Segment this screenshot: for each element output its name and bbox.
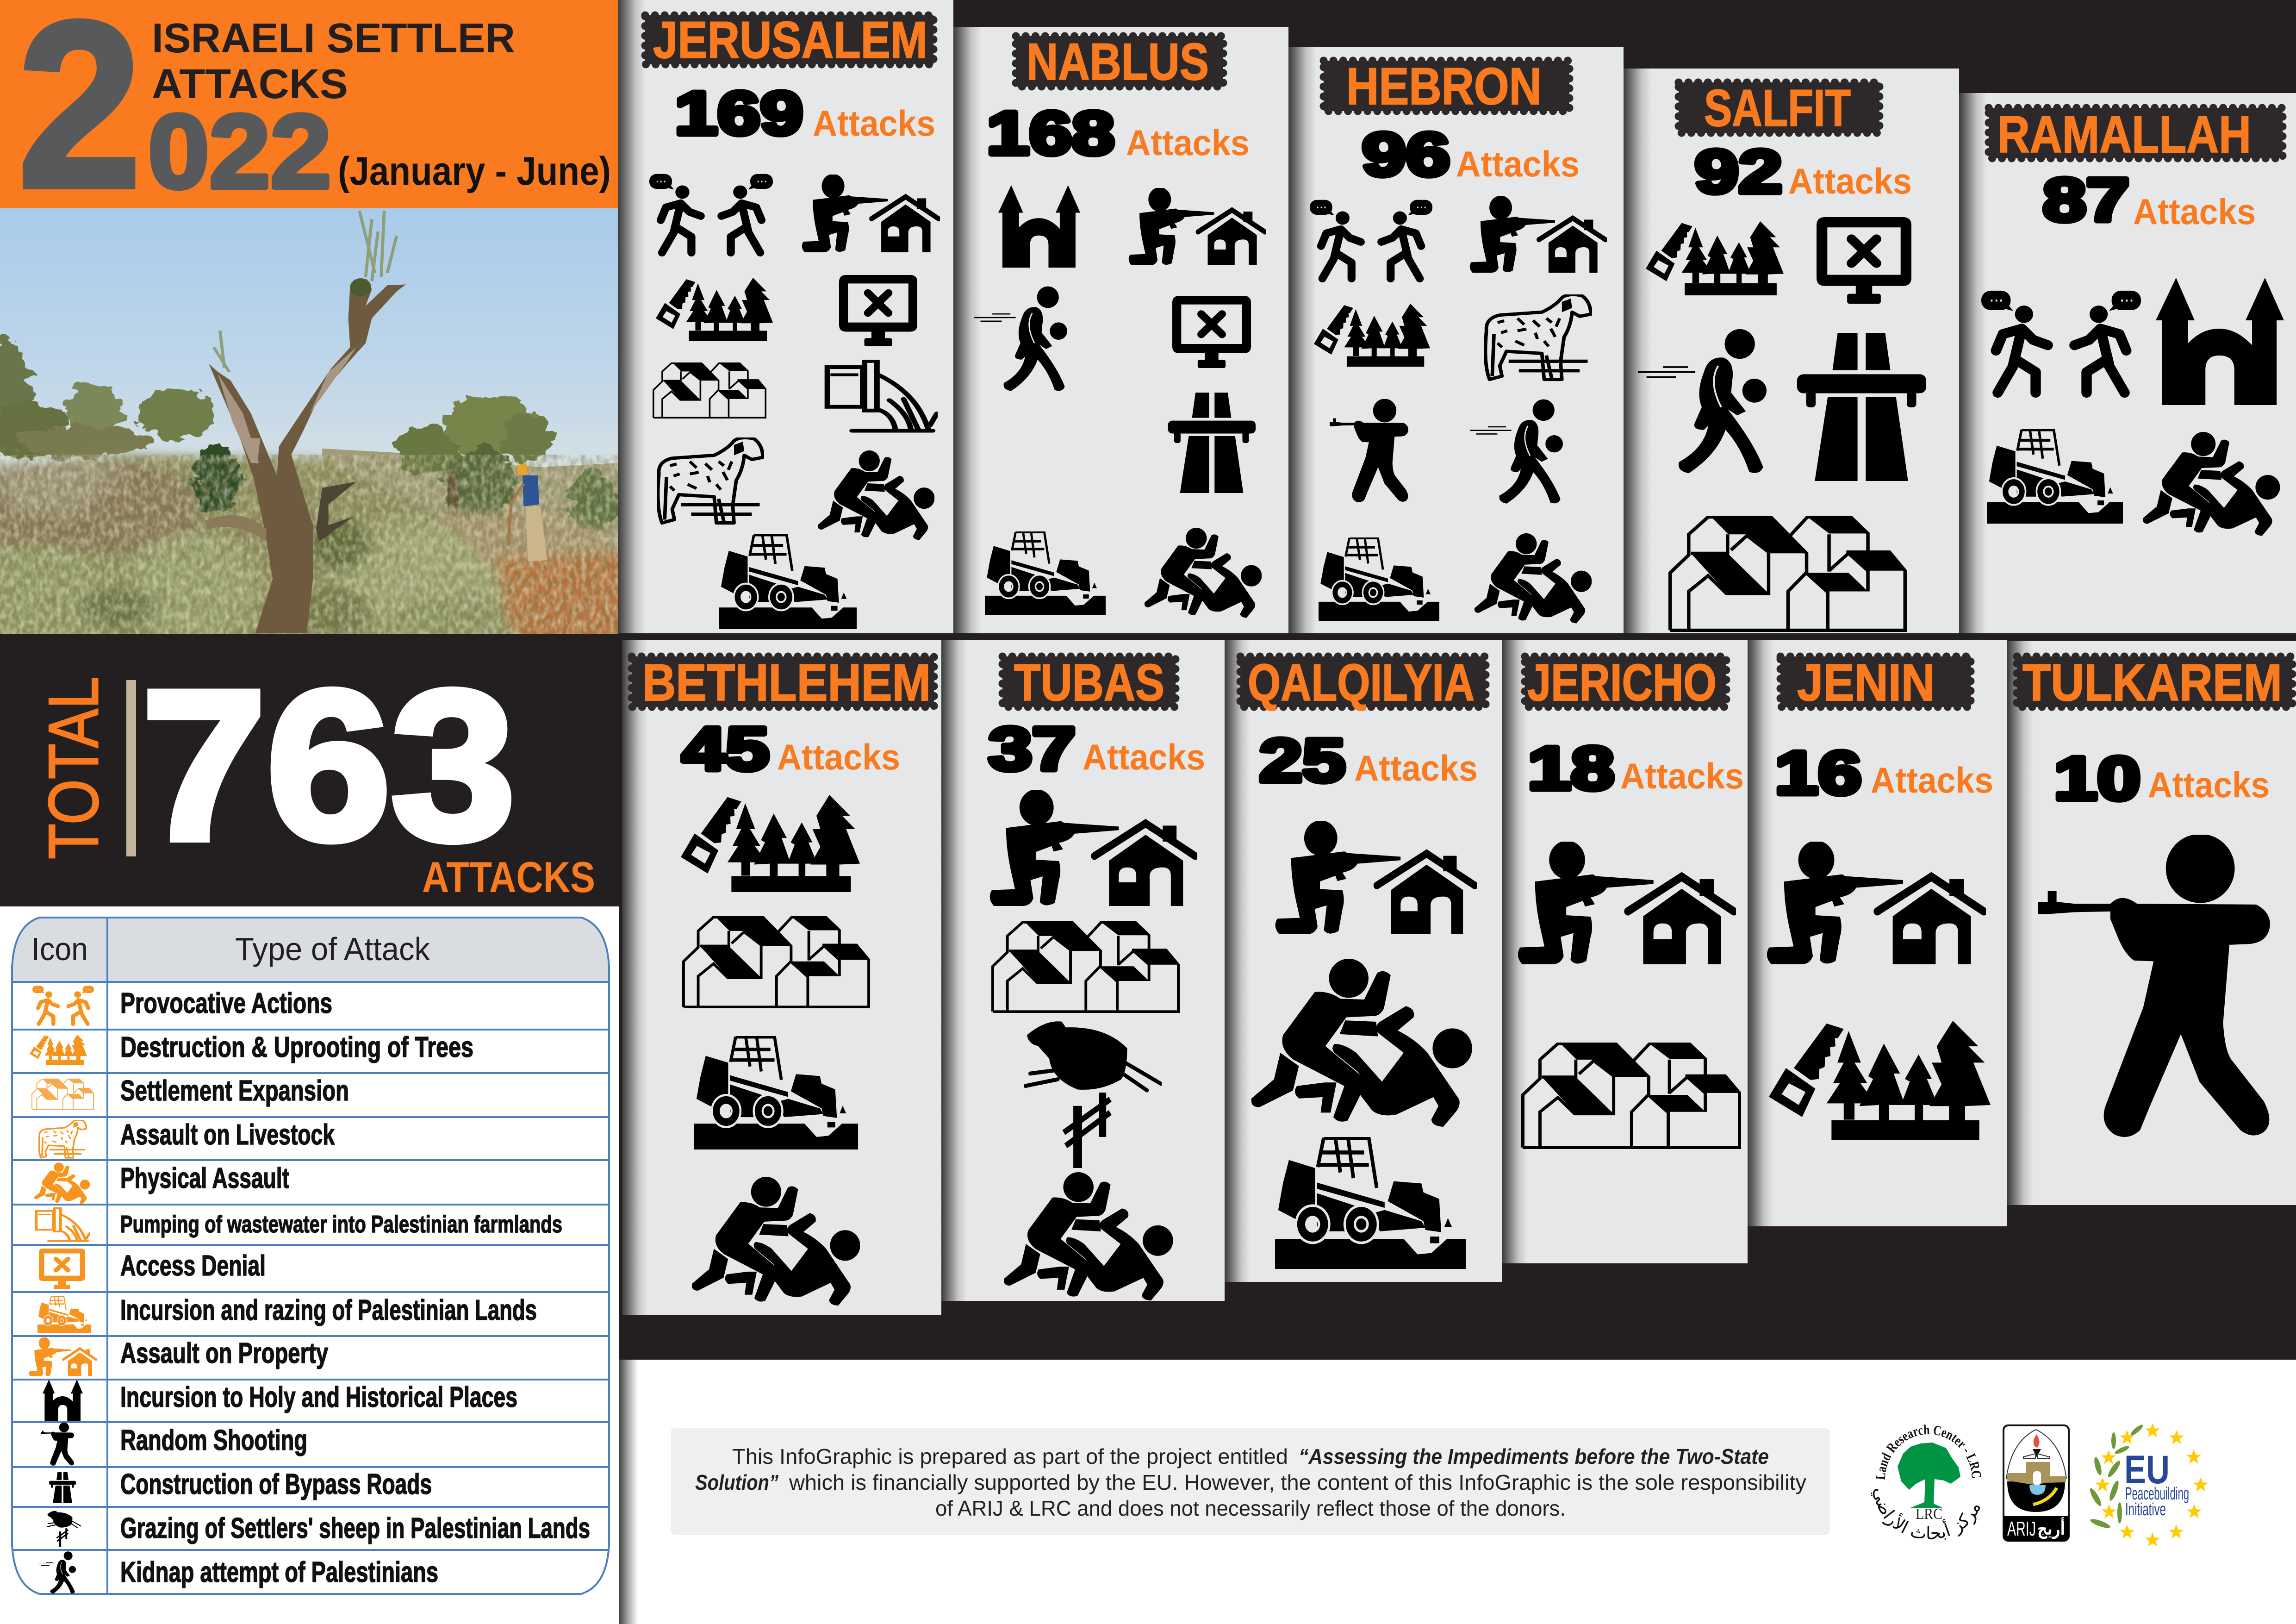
legend row: access denial [39,1249,266,1289]
count: Bethlehem: 45 [682,715,769,783]
count: Jerusalem: Attacks [813,103,935,144]
legend row: assault on livestock: Assault on Livestock [120,1119,335,1151]
legend row: assault on livestock [39,1119,335,1158]
legend row: provocative actions: Provocative Actions [120,987,332,1019]
banner: Ramallah: RAMALLAH [1997,106,2251,163]
table header: type of attack: Type of Attack [235,931,430,967]
legend row: pumping wastewater [36,1208,562,1241]
legend row: bypass roads: Construction of Bypass Roads [120,1468,432,1500]
count: Tubas [989,715,1205,783]
icons: Jerusalem [649,174,939,629]
banner: Jericho: JERICHO [1527,654,1717,712]
count: Hebron: Attacks [1456,144,1580,184]
logo: EU Peacebuilding Initiative [2088,1423,2208,1547]
count: Nablus [987,99,1250,167]
logo: Land Research Center: Land Research Center - LRC [1873,1422,1984,1480]
banner: Qalqilyia: QALQILYIA [1248,654,1475,712]
legend row: provocative actions [32,986,332,1024]
panel: Nablus [953,27,1288,633]
count: Qalqilyia: 25 [1259,726,1345,794]
count: Bethlehem [682,715,900,783]
panel: Ramallah [1959,93,2296,633]
panel: Tulkarem [2007,641,2296,1205]
legend row: holy places [43,1380,517,1421]
table header: icon: Icon [31,931,88,967]
count: Ramallah: 87 [2043,166,2129,234]
logo: Land Research Center [1871,1422,1985,1544]
count: Jenin: 16 [1775,739,1861,807]
legend row: assault on property [29,1337,328,1376]
count: Ramallah [2043,166,2256,234]
count: Tulkarem: Attacks [2148,764,2270,805]
panel: Jerusalem [618,0,953,633]
logo: ARIJ: ARIJ [2007,1518,2036,1540]
count: Salfit: Attacks [1788,161,1912,201]
legend row: access denial: Access Denial [120,1250,266,1282]
icons: Jenin [1767,841,1991,1140]
icons: Qalqilyia [1251,820,1475,1269]
count: Tulkarem: 10 [2054,744,2140,812]
total attacks panel [0,634,619,906]
panel: Jenin [1748,640,2007,1226]
icons: Nablus [974,185,1265,618]
banner: Salfit: SALFIT [1704,79,1851,137]
count: Jerusalem [675,79,935,147]
title line two: ATTACKS [152,61,348,107]
count: Qalqilyia [1259,726,1478,794]
legend row: grazing sheep: Grazing of Settlers' sheep in Palestinian Lands [120,1512,590,1544]
legend row: random shooting: Random Shooting [120,1424,307,1456]
icons: Hebron [1310,196,1605,623]
panel: Salfit [1624,69,1959,633]
disclaimer box [671,1428,1830,1535]
disclaimer box: which is financially supported by the EU. However, the content of this InfoGraphic is the sole responsibility [789,1470,1806,1494]
disclaimer box: This InfoGraphic is prepared as part of the project entitled [732,1444,1288,1468]
panel: Jericho [1502,640,1748,1263]
count: Jenin: Attacks [1871,760,1993,800]
banner: Bethlehem: BETHLEHEM [642,654,931,712]
total number: 763 [142,647,516,884]
legend row: destruction of trees [30,1031,473,1065]
legend row: bypass roads [49,1468,432,1503]
legend row: settlement expansion: Settlement Expansion [120,1075,349,1107]
legend row: physical assault: Physical Assault [120,1162,289,1194]
legend row: destruction of trees: Destruction & Uprooting of Trees [120,1031,473,1063]
panel: Qalqilyia [1225,640,1502,1282]
count: Jericho: 18 [1528,734,1614,802]
digits 022: 022 [148,93,331,210]
legend row: assault on property: Assault on Property [120,1337,328,1369]
legend row: incursion and razing: Incursion and razing of Palestinian Lands [120,1294,537,1326]
count: Qalqilyia: Attacks [1354,748,1478,788]
date range: (January - June) [338,149,611,194]
banner: Nablus: NABLUS [1027,33,1209,91]
icons: Bethlehem [681,795,869,1305]
legend row: settlement expansion [32,1075,349,1109]
panel: Tubas [941,640,1225,1301]
logo: Land Research Center: مركز أبحاث الأراضي [1871,1487,1985,1544]
logo: EU Peacebuilding Initiative: EU [2124,1448,2170,1492]
legend table grid [12,918,609,1594]
legend row: physical assault [34,1162,289,1204]
legend row: random shooting [41,1423,307,1466]
legend row: grazing sheep [47,1511,590,1547]
label: attacks: ATTACKS [422,853,595,901]
count: Nablus: 168 [987,99,1114,167]
banner: Tubas: TUBAS [1014,654,1164,712]
footer band [619,1360,2296,1624]
legend row: pumping wastewater: Pumping of wastewater into Palestinian farmlands [120,1211,562,1238]
icon: Tulkarem rifleman [2038,834,2270,1137]
count: Jericho [1528,734,1744,802]
count: Tubas: 37 [989,715,1076,783]
legend row: holy places: Incursion to Holy and Historical Places [120,1381,517,1413]
count: Jenin [1775,739,1993,807]
icons: Jericho [1518,841,1740,1148]
panel: Bethlehem [622,640,941,1315]
count: Salfit: 92 [1695,137,1782,206]
legend row: kidnap attempt: Kidnap attempt of Palestinians [120,1556,438,1588]
count: Salfit [1695,137,1912,206]
label: total: TOTAL [34,676,113,859]
icons: Salfit [1638,217,1926,630]
logo: ARIJ [2004,1425,2069,1542]
legend row: incursion and razing [37,1294,537,1333]
title block [0,0,618,237]
banner: Hebron: HEBRON [1346,57,1542,115]
logo: EU Peacebuilding Initiative: Peacebuilding [2125,1484,2189,1504]
count: Jericho: Attacks [1620,756,1744,796]
icons: Tubas [990,789,1195,1300]
icons: Ramallah [1981,278,2284,536]
count: Tulkarem [2054,744,2270,812]
count: Jerusalem: 169 [675,79,803,147]
divider bar [126,680,136,856]
disclaimer box: of ARIJ & LRC and does not necessarily reflect those of the donors. [935,1496,1566,1520]
count: Hebron: 96 [1362,120,1450,188]
disclaimer box: Solution” [695,1470,778,1494]
title line one: ISRAELI SETTLER [152,15,515,62]
logo: ARIJ: أريج [2037,1517,2065,1539]
count: Ramallah: Attacks [2133,191,2256,232]
count: Hebron [1362,120,1580,188]
count: Tubas: Attacks [1083,737,1205,777]
logo: Land Research Center: LRC [1916,1505,1942,1523]
photo: damaged olive tree [0,208,632,653]
logo: EU Peacebuilding Initiative: Initiative [2125,1500,2166,1519]
count: Nablus: Attacks [1126,122,1250,163]
legend panel [0,906,619,1624]
count: Bethlehem: Attacks [777,737,900,777]
legend row: kidnap attempt [38,1551,438,1593]
banner: Jerusalem: JERUSALEM [653,11,927,69]
panel: Hebron [1288,47,1624,633]
banner: Jenin: JENIN [1797,654,1935,712]
disclaimer box: “Assessing the Impediments before the Two-State [1299,1444,1769,1468]
